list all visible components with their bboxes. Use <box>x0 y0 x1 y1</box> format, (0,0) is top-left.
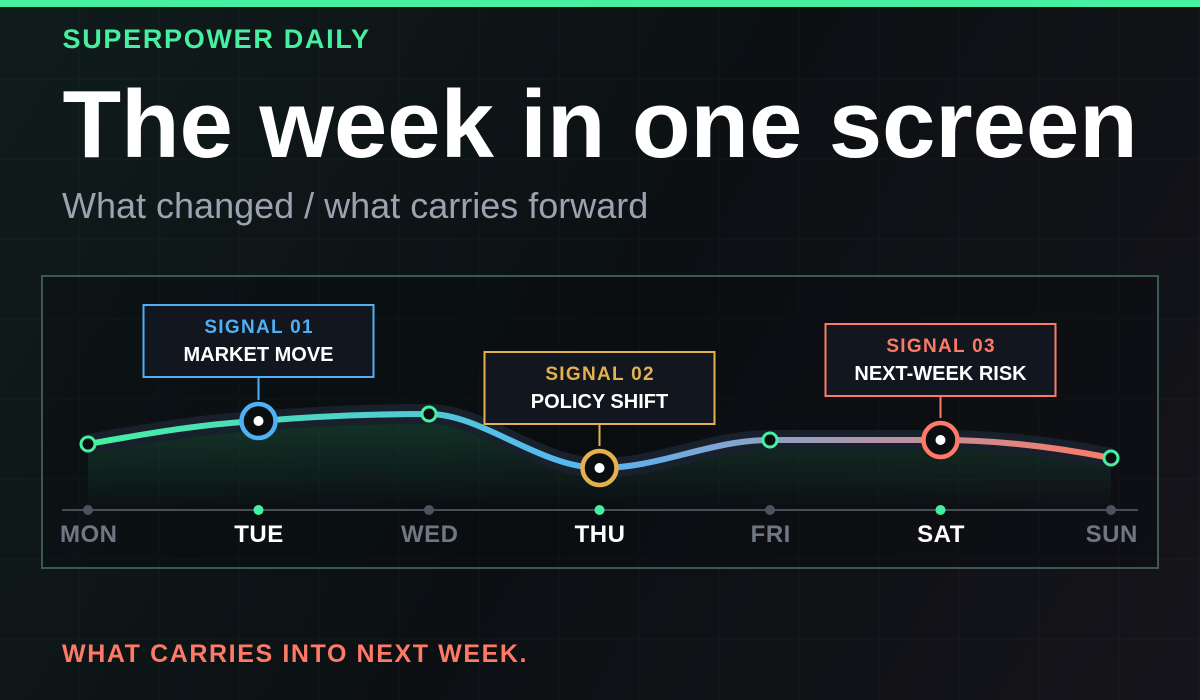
day labels: SAT <box>917 521 965 548</box>
day labels <box>60 521 1138 548</box>
closing takeaway: WHAT CARRIES INTO NEXT WEEK. <box>62 640 528 668</box>
callout: signal 03: NEXT-WEEK RISK <box>854 363 1027 385</box>
day labels: TUE <box>234 521 284 548</box>
callout: signal 01 <box>144 305 374 400</box>
day axis <box>62 505 1138 515</box>
marker: signal 03 <box>924 423 958 457</box>
callout: signal 03 <box>826 324 1056 418</box>
callout: signal 02 <box>484 352 714 446</box>
day labels: THU <box>575 521 625 548</box>
panel frame <box>42 276 1158 568</box>
curve halo <box>88 414 1111 468</box>
marker: signal 01 <box>242 404 276 438</box>
trend curve <box>88 414 1111 468</box>
minor markers <box>81 407 1118 465</box>
day labels: MON <box>60 521 118 548</box>
top accent bar <box>0 0 1200 7</box>
marker: signal 02 <box>582 451 616 485</box>
callout: signal 02: SIGNAL 02 <box>545 364 655 385</box>
area under curve <box>88 414 1111 510</box>
subtitle: What changed / what carries forward <box>62 185 648 226</box>
title: The week in one screen <box>62 71 1138 178</box>
callout: signal 01: SIGNAL 01 <box>204 317 314 338</box>
callout: signal 01: MARKET MOVE <box>184 344 334 366</box>
callout: signal 02: POLICY SHIFT <box>531 391 668 413</box>
panel: weekly timeline <box>42 276 1158 568</box>
eyebrow label: SUPERPOWER DAILY <box>62 24 371 54</box>
day labels: FRI <box>751 521 791 548</box>
callout: signal 03: SIGNAL 03 <box>886 336 996 357</box>
day labels: SUN <box>1086 521 1138 548</box>
day labels: WED <box>401 521 458 548</box>
